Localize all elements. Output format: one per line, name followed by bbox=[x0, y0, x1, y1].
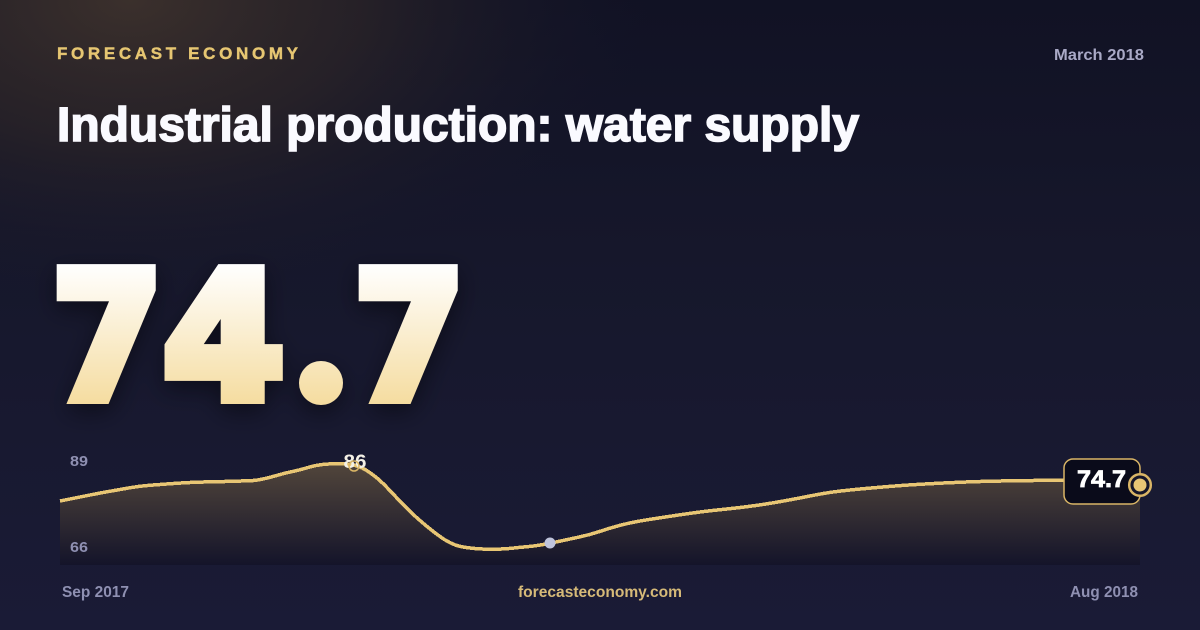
big value bbox=[56, 264, 458, 414]
current value marker bbox=[1129, 474, 1151, 496]
chart area fill bbox=[60, 464, 1140, 565]
peak marker bbox=[349, 461, 359, 471]
big value: 7 bbox=[354, 237, 464, 439]
website label: forecasteconomy.com bbox=[518, 584, 682, 601]
peak value label: 86 bbox=[344, 452, 366, 473]
brand eyebrow: FORECAST ECONOMY bbox=[57, 44, 302, 63]
current value callout: 74.7 bbox=[1077, 466, 1126, 493]
date label: March 2018 bbox=[1054, 47, 1144, 64]
y-axis max label: 89 bbox=[70, 453, 88, 470]
big value: 7 bbox=[52, 237, 162, 439]
chart line bbox=[60, 464, 1140, 549]
start date label: Sep 2017 bbox=[62, 584, 129, 601]
area chart bbox=[60, 452, 1151, 565]
y-axis min label: 66 bbox=[70, 539, 88, 556]
big value: 4 bbox=[163, 236, 284, 440]
title: Industrial production: water supply bbox=[57, 99, 859, 152]
end date label: Aug 2018 bbox=[1070, 584, 1138, 601]
current value callout bbox=[1064, 459, 1140, 504]
low marker bbox=[544, 538, 556, 548]
big value: . bbox=[302, 300, 340, 417]
